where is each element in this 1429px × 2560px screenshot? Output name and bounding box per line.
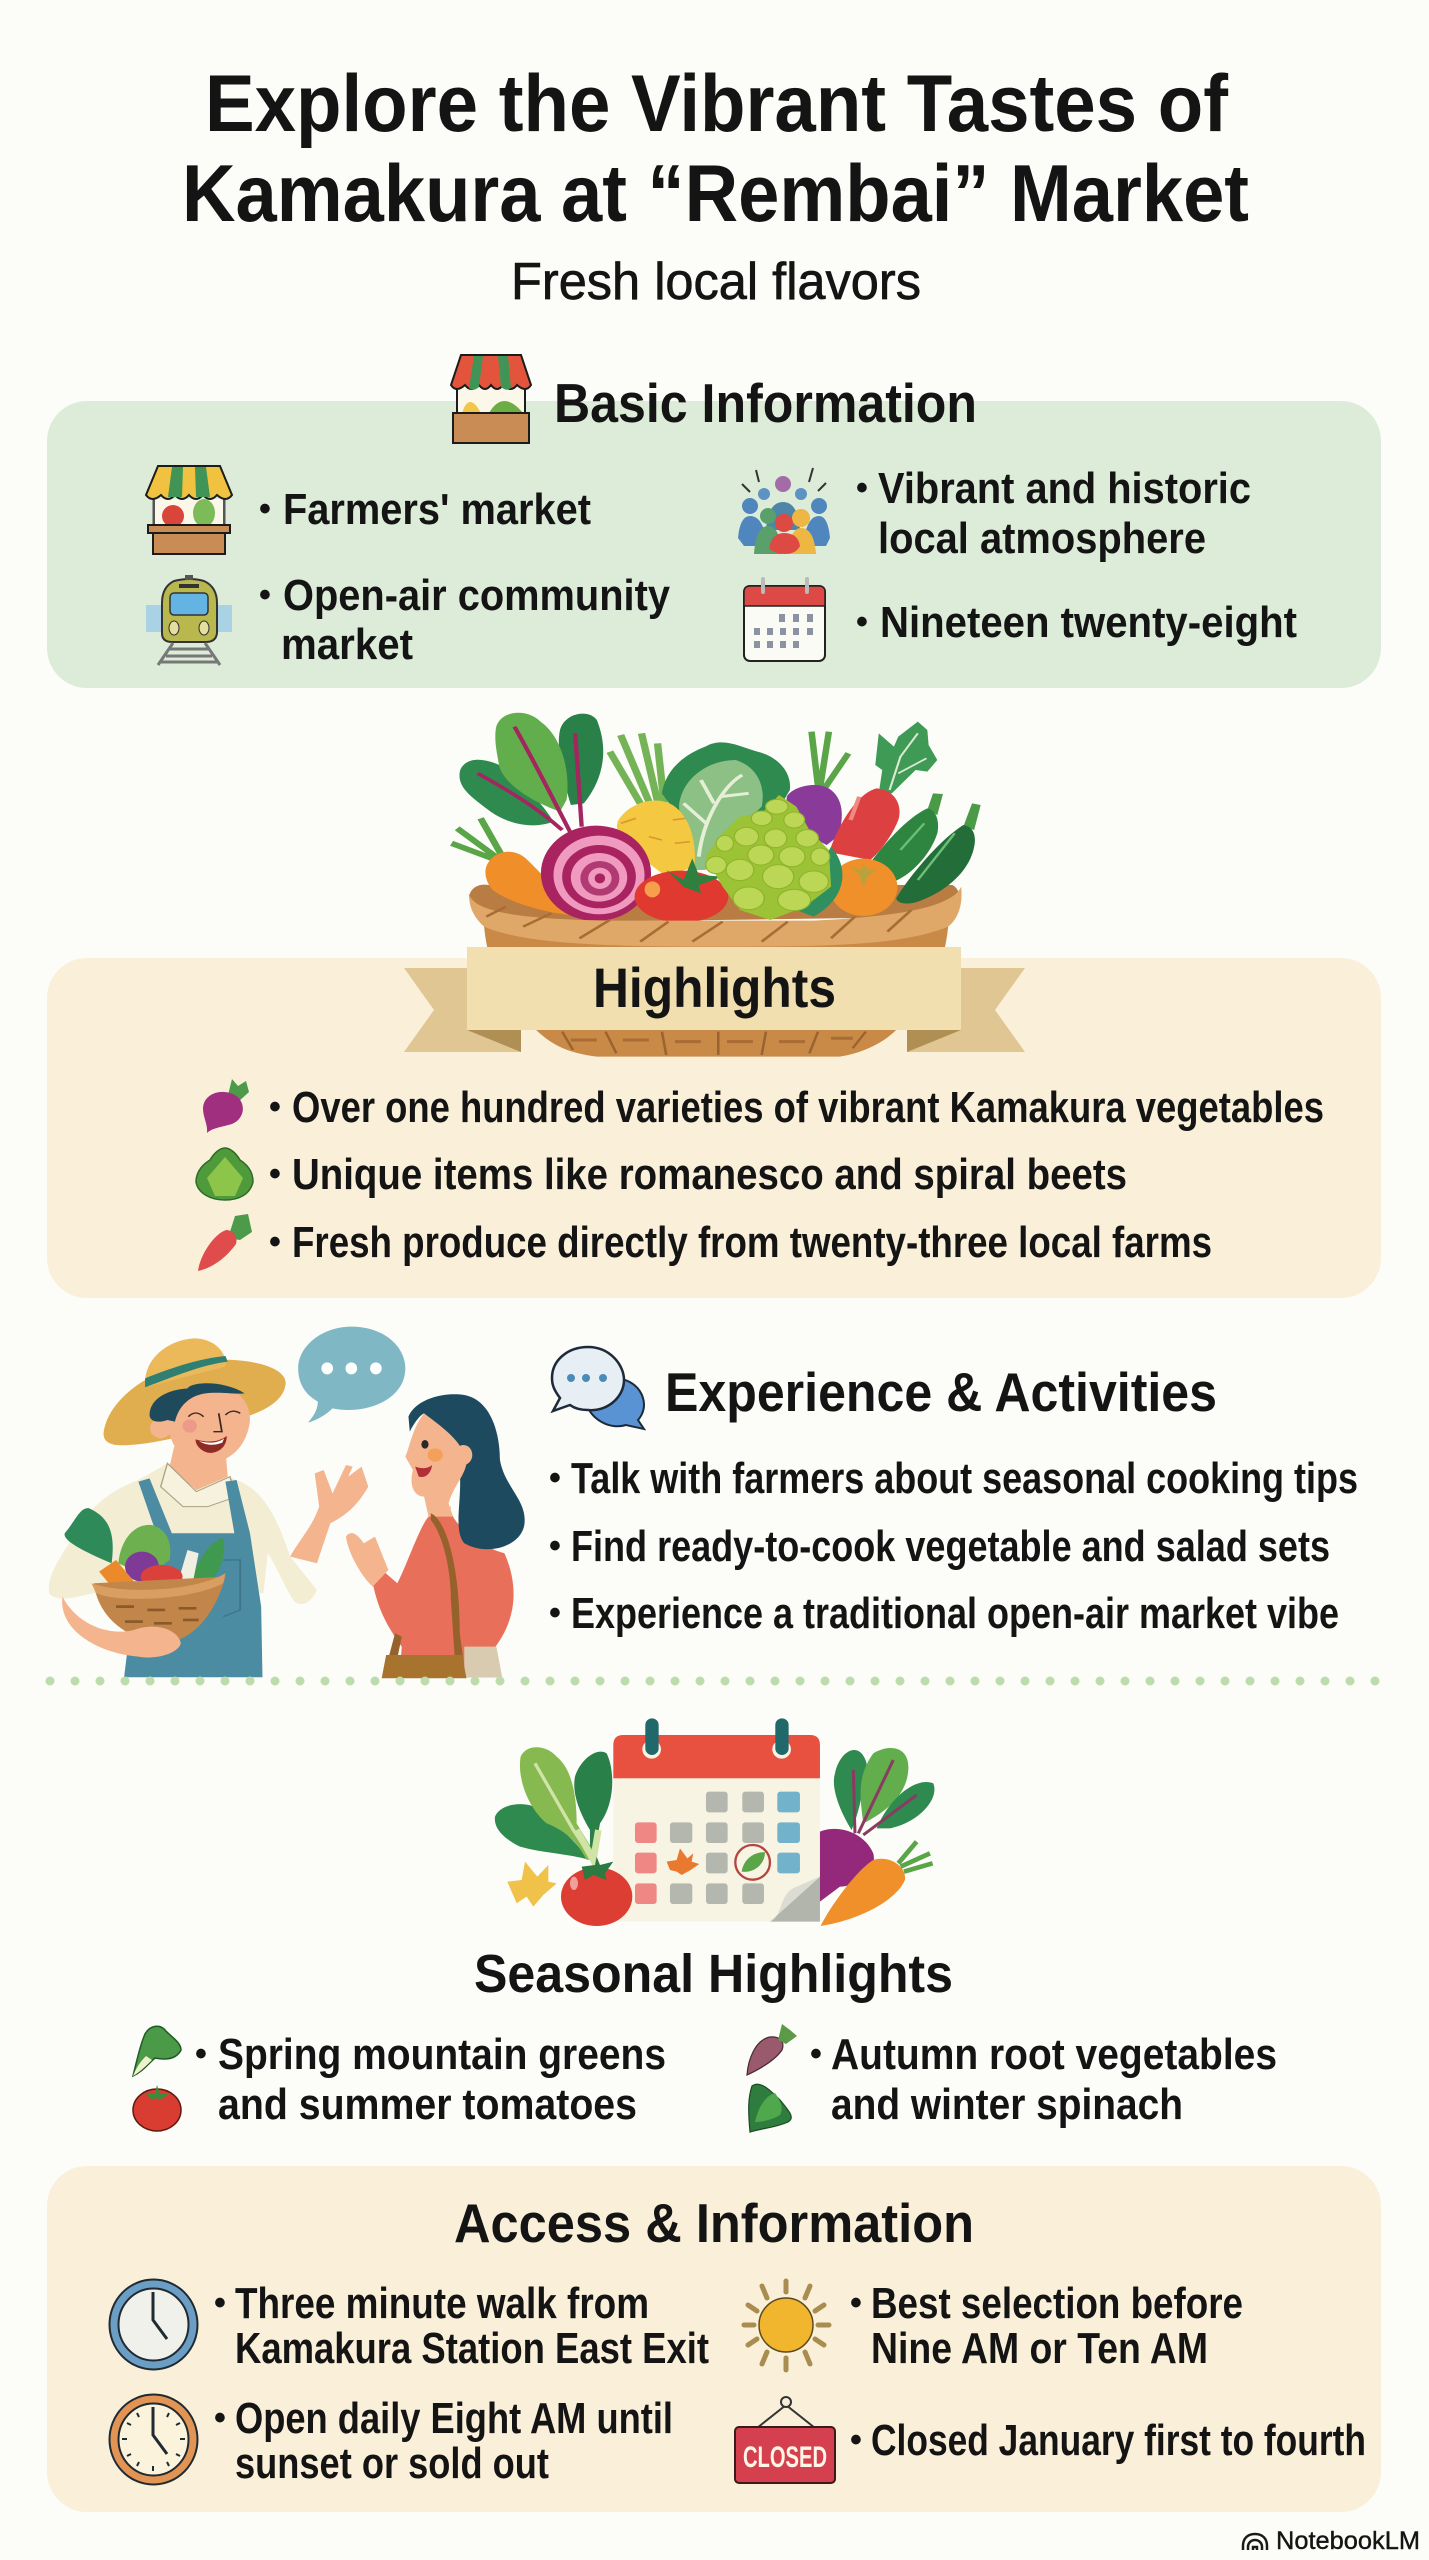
text: closed dates: •: [850, 2421, 862, 2459]
icon: carrot: [198, 1214, 252, 1271]
text: opening hours: [214, 2394, 673, 2488]
text: nineteen twenty-eight: •: [856, 603, 868, 641]
icon: winter spinach: [749, 2084, 791, 2132]
text: opening hours: Open daily Eight AM until: [235, 2394, 673, 2443]
subtitle: Fresh local flavors: [511, 253, 921, 311]
text: autumn and winter: •: [810, 2035, 822, 2073]
text: farmers' market: •: [259, 490, 271, 528]
text: autumn and winter: Autumn root vegetables: [831, 2030, 1277, 2079]
icon: notebooklm logo: [1243, 2534, 1267, 2550]
text: nineteen twenty-eight: Nineteen twenty-eight: [880, 598, 1297, 647]
text: best selection: Nine AM or Ten AM: [871, 2324, 1208, 2373]
icon: romanesco: [196, 1148, 253, 1200]
illustration: farmer talking with shopper: [49, 1327, 525, 1678]
panel: access & information: [47, 2166, 1381, 2512]
text: open-air community market: market: [281, 620, 413, 669]
highlights list: [196, 1079, 1324, 1271]
icon: spring greens: [133, 2026, 181, 2076]
icon: autumn root vegetable: [747, 2024, 797, 2075]
seasonal list: [133, 2024, 1277, 2132]
icon: closed sign: CLOSED: [743, 2441, 827, 2474]
text: best selection: •: [850, 2284, 862, 2322]
title: Kamakura at “Rembai” Market: [182, 149, 1249, 239]
shopper: [346, 1394, 525, 1678]
text: walk from station: [214, 2279, 709, 2373]
text: autumn and winter: and winter spinach: [831, 2080, 1183, 2129]
icon: farmers' market stall: [146, 466, 232, 554]
farmer: [49, 1338, 368, 1677]
icon: closed sign: [735, 2397, 835, 2483]
text: spring and summer: •: [195, 2035, 207, 2073]
highlights list: •: [269, 1223, 281, 1261]
title: Explore the Vibrant Tastes of: [205, 59, 1229, 149]
text: spring and summer: Spring mountain greens: [218, 2030, 666, 2079]
icon: sun: [744, 2281, 829, 2370]
icon: blue clock: [110, 2280, 198, 2370]
text: opening hours: •: [214, 2399, 226, 2437]
banner: highlights ribbon: [404, 947, 1025, 1052]
speech bubble: [298, 1327, 405, 1423]
title: [182, 59, 1249, 239]
panel: basic information: [47, 355, 1381, 688]
highlights list: •: [269, 1088, 281, 1126]
text: vibrant and historic local atmosphere: [856, 464, 1251, 563]
text: vibrant and historic local atmosphere: Vibrant and historic: [878, 464, 1251, 513]
illustration: seasonal calendar: [495, 1718, 934, 1926]
icon: chat bubbles: [552, 1347, 644, 1429]
text: spring and summer: and summer tomatoes: [218, 2080, 637, 2129]
icon: summer tomato: [133, 2085, 181, 2131]
text: experience list: [549, 1454, 1358, 1638]
text: best selection: [850, 2279, 1243, 2373]
text: open-air community market: •: [259, 576, 271, 614]
text: vibrant and historic local atmosphere: local atmosphere: [878, 514, 1206, 563]
icon: train: [146, 575, 232, 665]
text: walk from station: Kamakura Station East Exit: [235, 2324, 709, 2373]
text: opening hours: sunset or sold out: [235, 2439, 549, 2488]
icon: market stall header: [451, 355, 531, 443]
heading: experience & activities: Experience & Activities: [665, 1361, 1217, 1423]
heading: highlights: Highlights: [593, 956, 836, 1019]
text: experience list: •: [549, 1527, 561, 1565]
text: autumn and winter: [810, 2030, 1277, 2129]
text: vibrant and historic local atmosphere: •: [856, 469, 868, 507]
text: open-air community market: Open-air community: [283, 571, 670, 620]
panel: highlights background: [47, 958, 1381, 1298]
text: walk from station: •: [214, 2284, 226, 2322]
icon: calendar: [744, 579, 825, 661]
highlights list: Fresh produce directly from twenty-three local farms: [292, 1218, 1212, 1267]
highlights list: •: [269, 1155, 281, 1193]
illustration: vegetable basket: [452, 713, 981, 1057]
text: best selection: Best selection before: [871, 2279, 1243, 2328]
text: experience list: •: [549, 1594, 561, 1632]
heading: seasonal highlights: Seasonal Highlights: [474, 1944, 953, 2004]
icon: beet: [203, 1079, 249, 1133]
icon: crowd of people: [738, 468, 830, 554]
heading: access & information: Access & Information: [454, 2192, 974, 2254]
text: open-air community market: [259, 571, 670, 669]
text: spring and summer: [195, 2030, 666, 2129]
icon: orange clock: [110, 2394, 198, 2484]
heading: basic information: Basic Information: [554, 372, 977, 434]
text: walk from station: Three minute walk from: [235, 2279, 649, 2328]
text: experience list: •: [549, 1459, 561, 1497]
text: notebooklm: NotebookLM: [1276, 2527, 1420, 2555]
text: farmers' market: Farmers' market: [283, 485, 591, 534]
highlights list: Unique items like romanesco and spiral beets: [292, 1150, 1127, 1199]
